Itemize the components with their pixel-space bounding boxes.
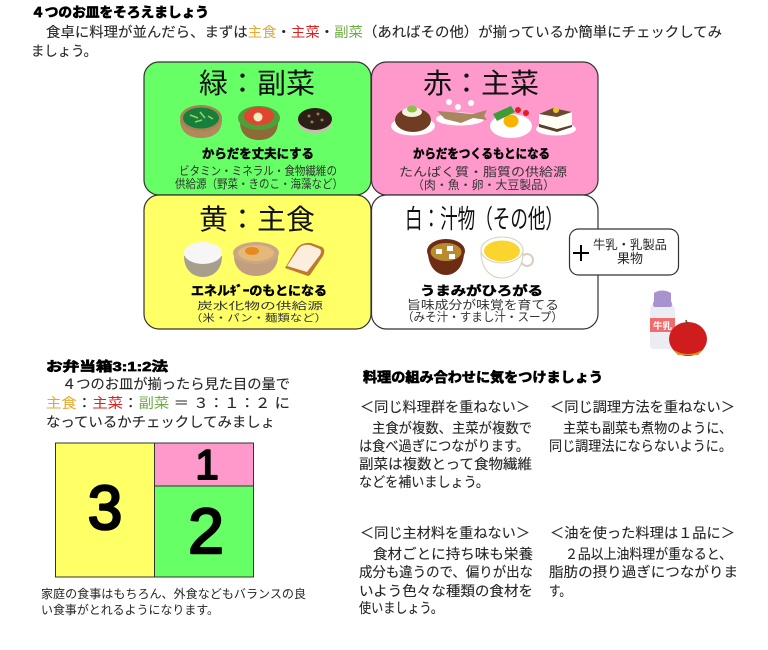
tip: same main ingredient [359,525,533,616]
tip: one oily dish [549,525,738,599]
bento note: 家庭の食事はもちろん、外食などもバランスの良 [41,586,306,601]
bento text: なっているかチェックしてみましょ [46,414,275,430]
heading: combination tips: 料理の組み合わせに気をつけましょう [363,369,603,385]
tip: same food group: などを補いましょう。 [359,474,489,490]
callout text [593,237,667,266]
callout: milk and fruit [570,229,678,275]
panel subheading: エネルｷﾞｰのもとになる [191,284,327,298]
chart: bento ratio box: 3 [88,474,122,543]
tip: same main ingredient: 食材ごとに持ち味も栄養 [373,546,533,562]
panel description: （肉・魚・卵・大豆製品） [412,178,555,192]
panel description: 供給源（野菜・きのこ・海藻など） [175,177,343,191]
panel description: （米・パン・麺類など） [190,312,327,324]
bento note [41,586,306,617]
bento text [46,376,290,430]
panel: pink main dish [372,62,598,195]
tip: one oily dish: ２品以上油料理が重なると、 [565,546,732,562]
intro text [31,24,722,59]
tip: one oily dish: す。 [549,583,571,599]
tip: same main ingredient: いよう色々な種類の食材を [359,583,533,599]
tip: one oily dish: ＜油を使った料理は１品に＞ [550,525,735,541]
icon: soup cup [481,237,533,278]
plus sign [573,245,589,261]
bento text: ４つのお皿が揃ったら見た目の量で [62,376,290,392]
tip: one oily dish: 脂肪の摂り過ぎにつながりま [549,564,738,580]
panel description [190,300,327,324]
panel heading: 赤：主菜 [423,68,539,99]
callout text: 牛乳・乳製品 [593,237,667,252]
icon: bread slice [285,243,324,276]
panel heading: 黄：主食 [199,204,315,235]
tip: same main ingredient: ＜同じ主材料を重ねない＞ [360,525,530,541]
intro text: ましょう。 [31,43,97,59]
panel description: 旨味成分が味覚を育てる [407,297,559,312]
tip: same cooking method [549,399,735,454]
tip: same cooking method: ＜同じ調理方法を重ねない＞ [550,399,735,415]
tip: same food group [359,399,532,490]
panel subheading: からだを丈夫にする [202,146,314,161]
tip: same main ingredient: 使いましょう。 [359,600,443,616]
section: bento 3:1:2 [41,359,306,617]
panel description: たんぱく質・脂質の供給源 [399,164,567,179]
icon: milk bottle: 牛乳 [653,320,672,331]
icon: apple [669,320,707,356]
panel description: ビタミン・ミネラル・食物繊維の [179,164,337,178]
bento text: 主食：主菜：副菜 ＝ ３：１：２ に [46,395,290,411]
panel subheading: からだをつくるもとになる [413,147,550,161]
icon: milk bottle [650,290,675,349]
panel subheading: うまみがひろがる [420,283,543,298]
icon: salad bowl [238,106,280,140]
icon: rice bowl [184,242,222,277]
icon: noodle bowl [233,242,279,276]
bento note: い食事がとれるようになります。 [41,602,219,617]
panel description [175,164,343,191]
tip: same food group: 主食が複数、主菜が複数で [372,420,532,436]
panel description: 炭水化物の供給源 [197,300,323,312]
tip: same food group: は食べ過ぎにつながります。 [359,438,529,454]
panel: green side dish [144,62,371,195]
icon: hijiki bowl [298,108,332,133]
chart: bento ratio box [56,441,254,577]
section: four dishes introduction [31,5,722,59]
panel description [402,297,563,324]
section: combination tips [359,369,738,616]
tip: same food group: ＜同じ料理群を重ねない＞ [360,399,530,415]
panel heading: 白：汁物（その他） [405,204,563,234]
tip: same cooking method: 主菜も副菜も煮物のように、 [563,420,732,436]
panel description: （みそ汁・すまし汁・スープ） [402,310,563,324]
icon: tofu [536,107,576,136]
chart: bento ratio box: 1 [195,441,219,488]
tip: same cooking method: 同じ調理法にならないように。 [549,438,732,454]
heading: four dishes: ４つのお皿をそろえましょう [31,5,209,20]
icon: hamburger steak [391,106,435,136]
intro text: 食卓に料理が並んだら、まずは 主食・主菜・副菜（あればその他）が揃っているか簡単にチェックしてみ [46,24,722,40]
icon: fried egg [490,106,532,138]
panel heading: 緑：副菜 [199,68,315,99]
heading: bento method: お弁当箱3:1:2法 [46,359,168,374]
icon: grilled fish [436,99,487,126]
icon: miso soup [427,239,465,275]
chart: bento ratio box: 2 [188,495,224,567]
callout text: 果物 [617,251,643,266]
icon: spinach bowl [180,105,222,138]
panel: white soup and other [372,195,598,329]
tip: same main ingredient: 成分も違うので、偏りが出な [359,564,533,580]
tip: same food group: 副菜は複数とって食物繊維 [359,456,532,472]
panel description [399,164,567,192]
panel: yellow staple food [144,195,371,329]
